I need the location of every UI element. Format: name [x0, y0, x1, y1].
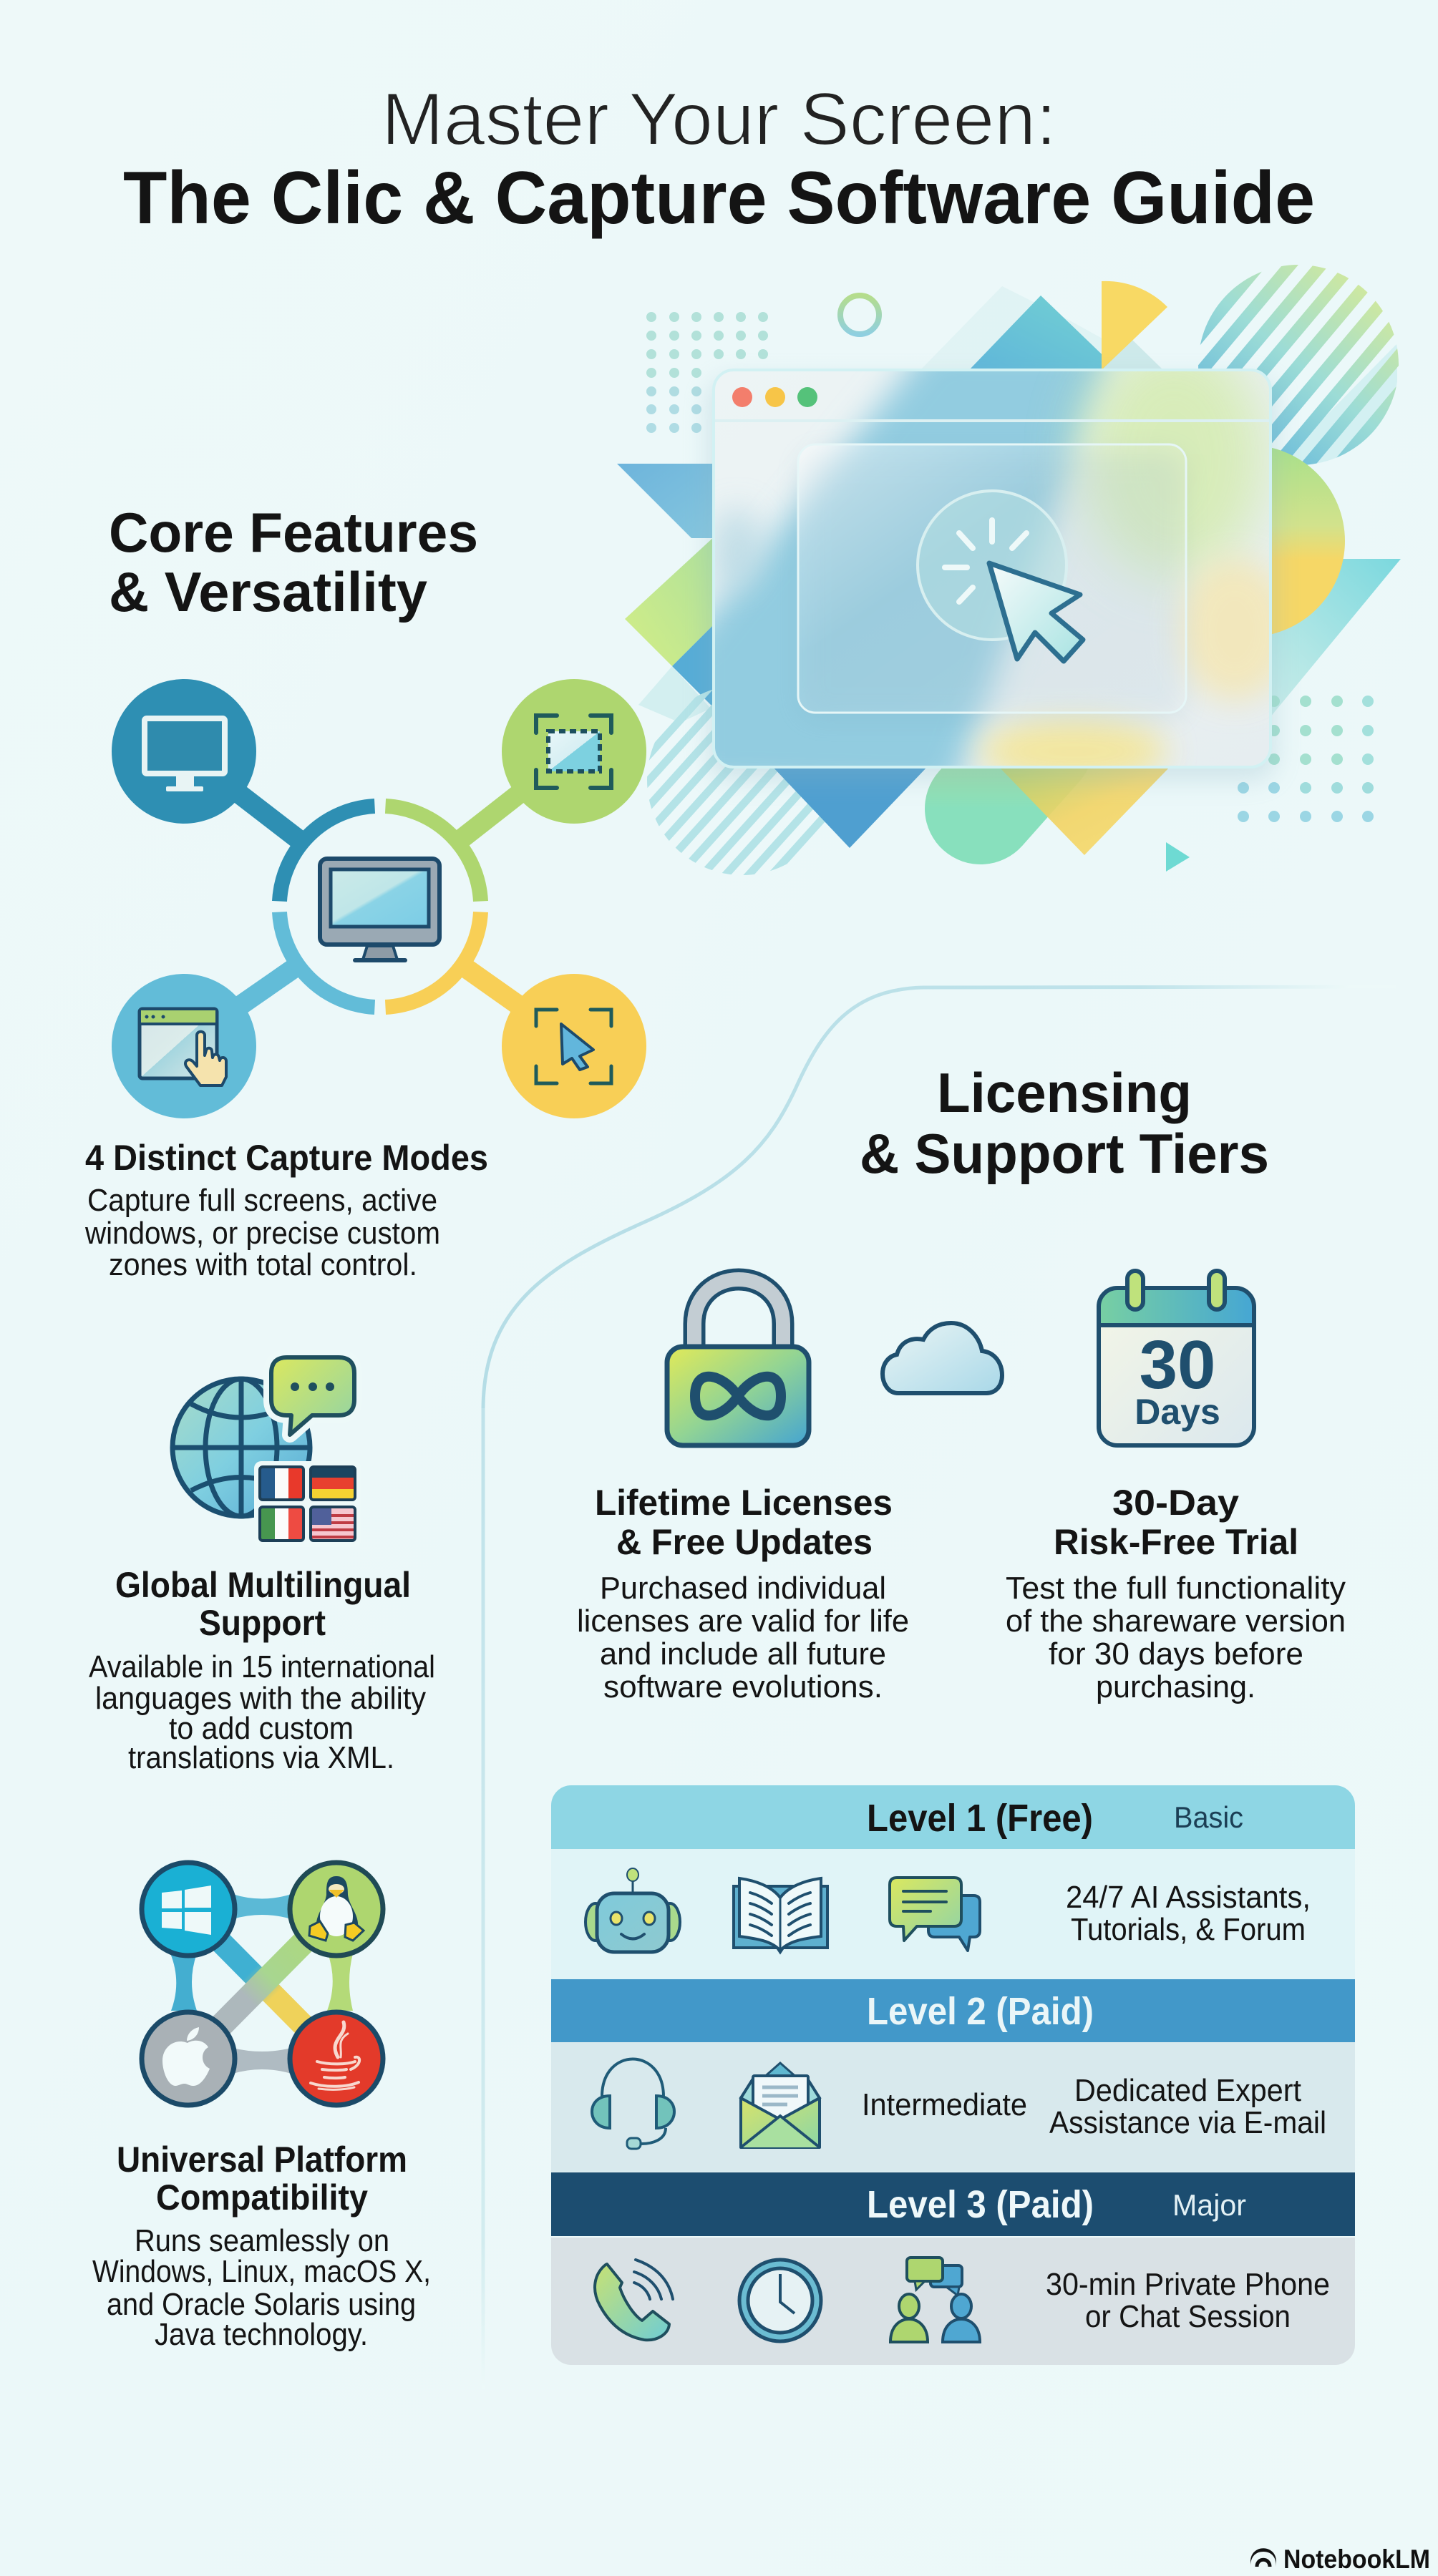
text: level 1 description: Tutorials, & Forum	[1071, 1912, 1306, 1947]
green diamond	[625, 535, 716, 666]
feature text: global multilingual support: Global Multilingual	[115, 1565, 411, 1605]
small teal triangle	[1166, 842, 1190, 872]
level 1 header: Basic	[1174, 1800, 1243, 1834]
level 1 header: Level 1 (Free)	[867, 1797, 1093, 1840]
window shadow	[709, 379, 1276, 780]
teal triangle	[969, 296, 1118, 370]
text: 30-day risk-free trial	[1006, 1483, 1346, 1704]
connectors	[215, 774, 544, 1023]
feature text: global multilingual support: translations via XML.	[128, 1740, 394, 1775]
feature text: universal platform compatibility: Windows, Linux, macOS X,	[92, 2254, 431, 2289]
text: level 2 description: Assistance via E-mail	[1049, 2105, 1326, 2140]
decorative divider curve	[481, 987, 1396, 2389]
feature text: universal platform compatibility: Runs seamlessly on	[135, 2223, 389, 2258]
feature text: 4 distinct capture modes: zones with total control.	[109, 1247, 417, 1282]
click halo	[918, 491, 1067, 640]
feature text: universal platform compatibility: and Oracle Solaris using	[107, 2287, 416, 2322]
feature text: global multilingual support: languages with the ability	[95, 1681, 426, 1716]
feature text: universal platform compatibility: Universal Platform	[117, 2140, 407, 2180]
platform connectors	[170, 1894, 353, 2074]
level 1 header	[867, 1797, 1243, 1840]
text: intermediate: Intermediate	[862, 2087, 1027, 2122]
blue triangle left	[617, 464, 716, 538]
blue triangle bottom	[772, 766, 928, 848]
feature text: global multilingual support: Available in 15 international	[89, 1649, 435, 1684]
icon: open book	[734, 1878, 827, 1952]
text: level 3 description: or Chat Session	[1085, 2299, 1291, 2334]
mode: active window	[112, 974, 256, 1118]
icon: calendar 30 days: Days	[1135, 1392, 1220, 1432]
teal triangle right	[1217, 559, 1401, 730]
icon: robot	[586, 1868, 680, 1952]
flags	[254, 1461, 361, 1547]
support tiers table	[551, 1785, 1355, 2365]
level 2 header: Level 2 (Paid)	[867, 1990, 1094, 2033]
blue triangle lower left	[672, 623, 716, 710]
text: lifetime licenses	[577, 1483, 909, 1704]
dot grid bottom right	[1238, 696, 1374, 822]
right circle	[1153, 445, 1345, 637]
text: level 1 description	[1066, 1880, 1311, 1947]
text: level 1 description: 24/7 AI Assistants,	[1066, 1880, 1311, 1915]
inner panel shadow	[800, 452, 1184, 718]
feature text: global multilingual support: to add custom	[169, 1711, 354, 1746]
text: 30-day risk-free trial: for 30 days before	[1049, 1636, 1303, 1672]
table bands	[551, 1785, 1355, 2365]
segmented ring	[279, 806, 481, 1008]
text: lifetime licenses: Lifetime Licenses	[595, 1483, 893, 1523]
text: level 2 description	[1049, 2073, 1326, 2140]
speech bubble	[271, 1357, 354, 1435]
text: lifetime licenses: & Free Updates	[616, 1522, 873, 1562]
icon: platform network	[142, 1863, 383, 2105]
mode: custom zone	[502, 679, 646, 824]
click rays	[945, 520, 1026, 602]
title: Master Your Screen:	[382, 78, 1056, 161]
traffic-light dots	[732, 387, 817, 407]
linux	[290, 1863, 383, 1956]
windows	[142, 1863, 235, 1956]
ring	[840, 296, 879, 334]
title	[123, 78, 1315, 240]
glass window	[712, 369, 1272, 769]
yellow wedge	[1102, 281, 1167, 370]
capture modes hub diagram	[112, 679, 646, 1118]
title: The Clic & Capture Software Guide	[123, 157, 1315, 240]
icon: center monitor	[320, 859, 439, 962]
icon: phone with waves	[595, 2260, 673, 2340]
pale triangle behind window	[920, 286, 1160, 370]
icon: globe with speech bubble and flags	[173, 1357, 361, 1547]
feature text: 4 distinct capture modes: 4 Distinct Capture Modes	[85, 1138, 488, 1178]
text: lifetime licenses: and include all future	[600, 1636, 886, 1672]
text: 30-day risk-free trial: of the shareware version	[1006, 1604, 1346, 1639]
feature text: 4 distinct capture modes: Capture full screens, active	[87, 1183, 437, 1218]
dot grid top left	[646, 312, 768, 433]
text: level 3 description: 30-min Private Phone	[1046, 2267, 1330, 2302]
text: 30-day risk-free trial: Risk-Free Trial	[1054, 1522, 1298, 1562]
yellow triangle	[998, 766, 1171, 855]
text: lifetime licenses: licenses are valid for life	[577, 1604, 909, 1639]
pale triangle right of wedge	[1102, 340, 1163, 370]
feature text: universal platform compatibility: Compatibility	[156, 2177, 368, 2218]
text: level 3 description	[1046, 2267, 1330, 2334]
feature text: 4 distinct capture modes: windows, or precise custom	[84, 1216, 440, 1251]
icon: envelope	[741, 2063, 820, 2147]
apple	[142, 2012, 235, 2105]
level 3 header: Level 3 (Paid)	[867, 2183, 1094, 2226]
heading: licensing and support	[860, 1061, 1269, 1185]
cursor arrow	[989, 563, 1083, 661]
hero illustration: abstract glass window with cursor	[605, 215, 1438, 918]
icon: padlock with infinity	[667, 1279, 809, 1445]
text: lifetime licenses: software evolutions.	[603, 1669, 883, 1704]
feature text: global multilingual support	[89, 1565, 435, 1775]
mode: cursor region	[502, 974, 646, 1118]
green pill	[981, 744, 1038, 809]
feature text: universal platform compatibility	[92, 2140, 431, 2352]
feature text: 4 distinct capture modes	[84, 1138, 488, 1282]
text: 30-day risk-free trial: Test the full functionality	[1006, 1571, 1346, 1606]
icon: headset	[592, 2059, 674, 2149]
level 3 header: Major	[1172, 2188, 1246, 2222]
pale triangle lower left	[638, 666, 711, 723]
java	[290, 2012, 383, 2105]
text: 30-day risk-free trial: 30-Day	[1112, 1483, 1239, 1523]
icon: chat bubbles	[890, 1878, 980, 1951]
globe	[173, 1379, 310, 1516]
feature text: global multilingual support: Support	[199, 1603, 326, 1643]
striped circle top right	[1198, 265, 1399, 465]
mode: full screen	[112, 679, 256, 824]
text: 30-day risk-free trial: purchasing.	[1096, 1669, 1255, 1704]
icon: calendar 30 days: 30	[1140, 1327, 1215, 1403]
inner glass panel	[798, 444, 1186, 713]
icon: calendar 30 days	[1097, 1271, 1255, 1445]
heading: licensing and support: Licensing	[937, 1061, 1192, 1124]
level 3 header	[867, 2183, 1246, 2226]
icon: people with chat	[890, 2258, 980, 2342]
heading: core features: & Versatility	[109, 560, 427, 623]
feature text: universal platform compatibility: Java technology.	[155, 2317, 368, 2352]
heading: licensing and support: & Support Tiers	[860, 1122, 1269, 1185]
text: lifetime licenses: Purchased individual	[600, 1571, 886, 1606]
icon: clock	[739, 2260, 821, 2341]
heading: core features: Core Features	[109, 501, 478, 564]
text: level 2 description: Dedicated Expert	[1074, 2073, 1301, 2108]
icon: cloud	[883, 1323, 1002, 1393]
heading: core features	[109, 501, 478, 623]
striped circle lower left	[647, 690, 825, 875]
